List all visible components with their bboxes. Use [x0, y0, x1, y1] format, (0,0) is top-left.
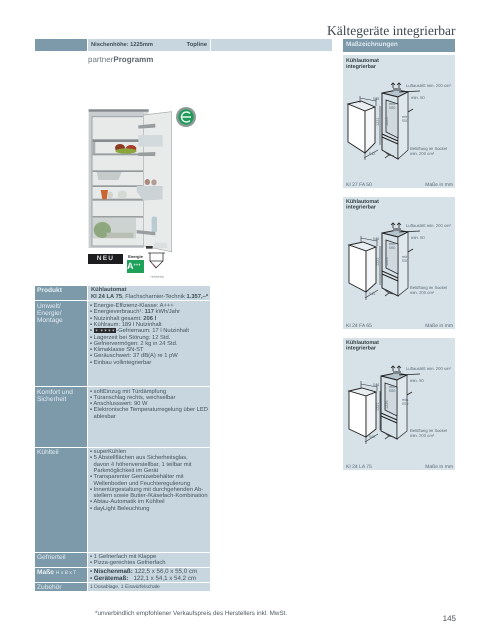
row: Komfort und Sicherheit: ▪ Türanschlag rechts, wechselbar [90, 395, 175, 401]
panel: KI 24 LA 75 drawing: min. 200 cm² [410, 433, 435, 438]
panel: KI 24 FA 65 drawing: min. 50 [411, 235, 425, 240]
panel: KI 24 FA 65 drawing: 560 [389, 246, 395, 250]
badge: NEU: NEU [97, 255, 114, 262]
panel: KI 24 FA 65 drawing: Kühlautomat [346, 199, 379, 205]
badge: NEU [88, 254, 123, 264]
row: Umwelt/Energie/Montage: Energie/ [37, 310, 62, 317]
header bar: niche height and series [88, 39, 210, 51]
row: Kühlteil: davon 4 höhenverstellbar, 1 teilbar mit [94, 462, 191, 468]
row: Kühlteil: ▪ 5 Abstellflächen aus Sicherheitsglas, [90, 455, 188, 461]
row: Maße: Maße H x B x T [37, 569, 76, 576]
row: Zubehör: Zubehör [37, 584, 62, 590]
row: Gefrierteil: ▪ Pizza-gerechtes Gefrierfach [90, 560, 166, 566]
row: Umwelt/Energie/Montage: ▪ Geräuschwert: 37 dB(A) re 1 pW [90, 353, 178, 359]
row: Komfort und Sicherheit [35, 387, 210, 447]
panel: KI 27 FA 50 drawing [343, 55, 455, 188]
row: Kühlteil: ▪ dayLight Beleuchtung [90, 506, 149, 512]
panel: KI 24 LA 75 drawing: min. [389, 385, 396, 389]
row: Umwelt/Energie/Montage: ▪ Gefriervermögen: 2 kg in 24 Std. [90, 341, 177, 347]
icon: installation type [148, 252, 165, 278]
panel: KI 24 FA 65 drawing: integrierbar [346, 204, 377, 210]
panel: KI 27 FA 50 drawing: min. [389, 102, 396, 106]
row: Kühlteil: ▪ Innentürgestaltung mit durchgehenden Ab- [90, 487, 203, 493]
row: Kühlteil: stellern sowie Butter-/Käsefach-Kombination [94, 493, 208, 499]
title: Kältegeräte integrierbar [327, 23, 456, 38]
panel: KI 27 FA 50 drawing: Kühlautomat [346, 58, 379, 64]
row: Produkt [35, 286, 210, 300]
panel: KI 27 FA 50 drawing: min. 200 cm² [410, 151, 435, 156]
panel: KI 27 FA 50 drawing: 560 [389, 106, 395, 110]
header bar: right filler [211, 39, 332, 51]
row: Umwelt/Energie/Montage: ▪ Nutzinhalt gesamt: 206 l [90, 316, 156, 322]
panel: KI 24 FA 65 drawing: Belüftung im Sockel [410, 285, 447, 290]
panel: KI 27 FA 50 drawing: 550 [402, 119, 408, 123]
panel: KI 24 FA 65 drawing: KI 24 FA 65 [346, 323, 372, 329]
row: Komfort und Sicherheit: ▪ Anschlusswert: 90 W [90, 401, 147, 407]
panel: KI 27 FA 50 drawing: KI 27 FA 50 [346, 182, 372, 188]
row: Gefrierteil [35, 553, 210, 567]
row: Zubehör [35, 583, 210, 591]
partnerProgramm logo text: partnerProgramm [88, 55, 153, 64]
product photo: fridge [88, 109, 172, 252]
header bar: niche height and series: Topline [186, 42, 207, 48]
panel: KI 27 FA 50 drawing: Maße in mm [425, 182, 453, 188]
panel: KI 24 LA 75 drawing: Kühlautomat [346, 340, 379, 346]
panel: KI 27 FA 50 drawing: 538 [373, 97, 379, 101]
icon: green energy seal [176, 107, 196, 127]
row: Kühlteil: Parkmöglichkeit im Gerät [94, 468, 158, 474]
row: Komfort und Sicherheit: Sicherheit [37, 396, 66, 403]
panel: KI 24 FA 65 drawing: 1221 [376, 258, 380, 266]
row: Umwelt/Energie/Montage: ▪ Lagerzeit bei Störung: 12 Std. [90, 334, 170, 340]
panel: KI 24 FA 65 drawing: 541 [373, 237, 379, 241]
badge: energy class: Energie [128, 254, 143, 259]
panel: KI 27 FA 50 drawing: Luftaustritt min. 200 cm² [406, 83, 452, 88]
row: Umwelt/Energie/Montage: ▪ ✶ ✶✶✶✶-Gefrierraum: 17 l Nutzinhalt [90, 328, 189, 334]
panel: KI 24 LA 75 drawing: 550 [402, 402, 408, 406]
row: Umwelt/Energie/Montage: Montage [37, 317, 63, 324]
panel: KI 24 LA 75 drawing: min. [402, 398, 409, 402]
row: Produkt: Kühlautomat [91, 287, 126, 293]
header: Maßzeichnungen: Maßzeichnungen [346, 41, 398, 48]
panel: KI 24 FA 65 drawing: min. 200 cm² [410, 290, 435, 295]
icon: installation type: Holzleitung [151, 276, 164, 278]
panel: KI 27 FA 50 drawing: integrierbar [346, 64, 377, 70]
row: Produkt: Produkt [37, 287, 62, 294]
row: Kühlteil: ▪ Transparenter Gemüsebehälter mit [90, 474, 184, 480]
panel: KI 27 FA 50 drawing: 1225 [385, 118, 389, 126]
row: Kühlteil [35, 448, 210, 552]
row: Umwelt/Energie/Montage [35, 301, 210, 386]
panel: KI 24 LA 75 drawing: KI 24 LA 75 [346, 464, 372, 470]
panel: KI 24 LA 75 drawing: 541 [373, 383, 379, 387]
panel: KI 27 FA 50 drawing: min. [402, 115, 409, 119]
row: Kühlteil: ▪ Abtau-Automatik im Kühlteil [90, 499, 165, 505]
badge: energy class: A+++ [127, 261, 141, 271]
panel: KI 24 LA 75 drawing: 1225 [385, 401, 389, 409]
panel: KI 24 LA 75 drawing: 560 [389, 389, 395, 393]
panel: KI 27 FA 50 drawing: 542 [369, 152, 375, 156]
panel: KI 24 FA 65 drawing: 550 [402, 259, 408, 263]
panel: KI 24 LA 75 drawing: min. 50 [410, 378, 424, 383]
row: Gefrierteil: ▪ 1 Gefrierfach mit Klappe [90, 554, 156, 560]
panel: KI 24 FA 65 drawing: 545 [369, 292, 375, 296]
panel: KI 27 FA 50 drawing: Belüftung im Sockel [410, 146, 447, 151]
header bar: left swatch [35, 39, 87, 51]
row: Gefrierteil: Gefrierteil [37, 554, 66, 561]
badge: energy class [127, 254, 144, 273]
panel: KI 24 FA 65 drawing: 1225 [385, 258, 389, 266]
row: Komfort und Sicherheit: ▪ softEinzug mit Türdämpfung [90, 388, 166, 394]
panel: KI 24 FA 65 drawing: Maße in mm [425, 323, 453, 329]
panel: KI 24 LA 75 drawing: Luftaustritt min. 200 cm² [406, 366, 452, 371]
panel: KI 24 LA 75 drawing: 1221 [376, 403, 380, 411]
page number: 145 [443, 614, 456, 623]
row: Komfort und Sicherheit: ablesbar [94, 414, 116, 420]
row: Kühlteil: Wellenboden und Feuchteregulierung [94, 480, 190, 486]
row: Kühlteil: ▪ superKühlen [90, 449, 126, 455]
panel: KI 24 FA 65 drawing: min. [402, 255, 409, 259]
header: Maßzeichnungen [343, 39, 455, 52]
row: Umwelt/Energie/Montage: ▪ Einbau vollintegrierbar [90, 360, 151, 366]
panel: KI 24 LA 75 drawing: integrierbar [346, 346, 377, 352]
row: Zubehör: 1 Dosablage, 1 Eiswürfelschale [90, 584, 160, 590]
panel: KI 24 LA 75 drawing [343, 338, 455, 470]
header bar: niche height and series: Nischenhöhe: 1225mm [91, 42, 153, 48]
panel: KI 27 FA 50 drawing: 1221 [376, 118, 380, 126]
row: Maße [35, 568, 210, 582]
panel: KI 24 FA 65 drawing [343, 197, 455, 329]
panel: KI 24 LA 75 drawing: 542 [369, 435, 375, 439]
footnote: *unverbindlich empfohlener Verkaufspreis des Herstellers inkl. MwSt. [95, 610, 287, 617]
row: Maße: ▪ Nischenmaß: 122,5 x 56,0 x 55,0 cm [90, 568, 197, 575]
row: Umwelt/Energie/Montage: ▪ Kühlraum: 189 l Nutzinhalt [90, 322, 162, 328]
row: Umwelt/Energie/Montage: ▪ Energieverbrauch¹: 117 kWh/Jahr [90, 309, 180, 315]
panel: KI 27 FA 50 drawing: min. 50 [411, 95, 425, 100]
row: Umwelt/Energie/Montage: ▪ Energie-Effizienz-Klasse: A+++ [90, 303, 174, 309]
row: Produkt: KI 24 LA 75, Flachscharnier-Technik 1.357,–* [91, 294, 208, 300]
row: Umwelt/Energie/Montage: Umwelt/ [37, 303, 61, 310]
row: Kühlteil: Kühlteil [37, 449, 59, 456]
row: Maße: ▪ Gerätemaß: 122,1 x 54,1 x 54,2 cm [90, 575, 196, 582]
row: Komfort und Sicherheit: ▪ Elektronische Temperaturregelung über LED [90, 407, 208, 413]
panel: KI 24 FA 65 drawing: Luftaustritt min. 200 cm² [406, 223, 452, 228]
panel: KI 24 LA 75 drawing: Belüftung im Sockel [410, 428, 447, 433]
row: Umwelt/Energie/Montage: ▪ Klimaklasse SN-ST [90, 347, 144, 353]
row: Komfort und Sicherheit: Komfort und [37, 388, 73, 396]
panel: KI 24 LA 75 drawing: Maße in mm [425, 464, 453, 470]
panel: KI 24 FA 65 drawing: min. [389, 242, 396, 246]
